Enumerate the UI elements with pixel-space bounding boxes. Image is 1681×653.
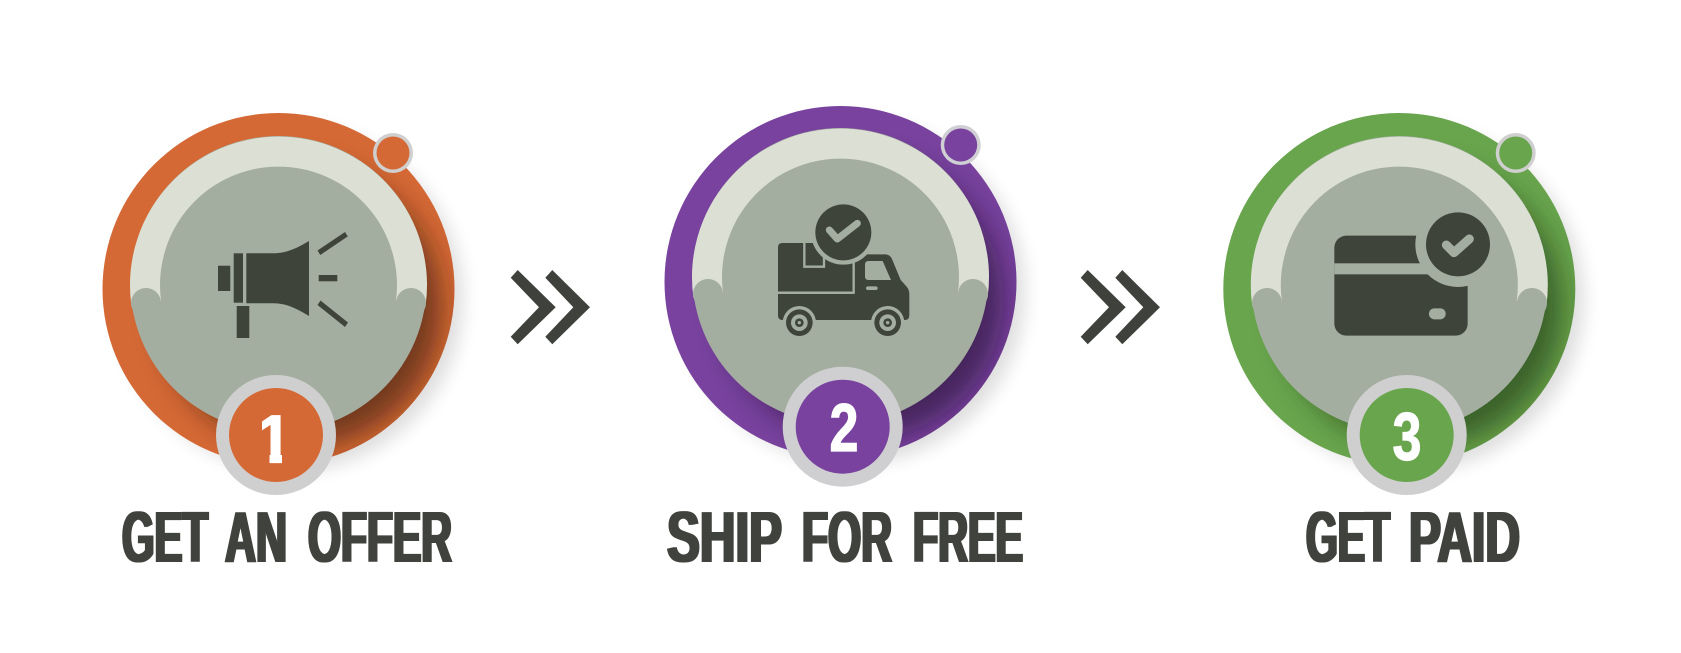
arc end caps 1 [131,288,426,318]
step 2: ship for free [664,106,1025,487]
outer shadow 1 [119,127,463,471]
light arc 1 [145,152,412,303]
icon: delivery truck with check [778,200,909,339]
number badge 3: 3 [1392,398,1422,474]
outer shadow 2 [681,120,1025,464]
outer ring 3 [1223,113,1575,465]
heading: ship for free: SHIP [667,498,782,578]
light arc 3 [1266,152,1533,303]
disc 3 [1251,136,1547,432]
heading: ship for free: FREE [913,498,1023,578]
step 1: get an offer [102,113,463,495]
heading: ship for free: FOR [802,498,892,578]
heading: get an offer [122,498,452,578]
heading: get an offer: GET [122,498,208,578]
heading: get an offer: AN [225,498,287,578]
arc end caps 2 [693,279,988,309]
outer ring 1 [102,113,454,465]
disc 1 [130,136,426,432]
number badge 2: 2 [830,390,858,466]
disc 2 [692,128,988,424]
icon: credit card with check [1334,202,1501,336]
number badge 3 [1347,375,1467,495]
outer shadow 3 [1240,127,1584,471]
arrow 2 [1081,270,1160,344]
small dot 2 [941,125,981,165]
step 3: get paid [1223,113,1584,495]
heading: ship for free [667,498,1023,578]
heading: get an offer: OFFER [308,498,452,578]
heading: get paid: GET [1306,498,1390,578]
small dot 3 [1496,133,1536,173]
number badge 1: 1 [256,402,292,478]
disc shadow 1 [161,167,441,447]
heading: get paid [1306,498,1520,578]
outer ring 2 [664,106,1016,458]
disc shadow 3 [1282,167,1562,447]
disc shadow 2 [723,159,1003,439]
arc end caps 3 [1252,288,1547,318]
heading: get paid: PAID [1409,498,1520,578]
arrow 1 [511,270,590,344]
small dot 1 [373,133,413,173]
number badge 1 [216,375,336,495]
number badge 2 [783,367,903,487]
light arc 2 [707,144,974,295]
icon: megaphone [218,232,348,338]
